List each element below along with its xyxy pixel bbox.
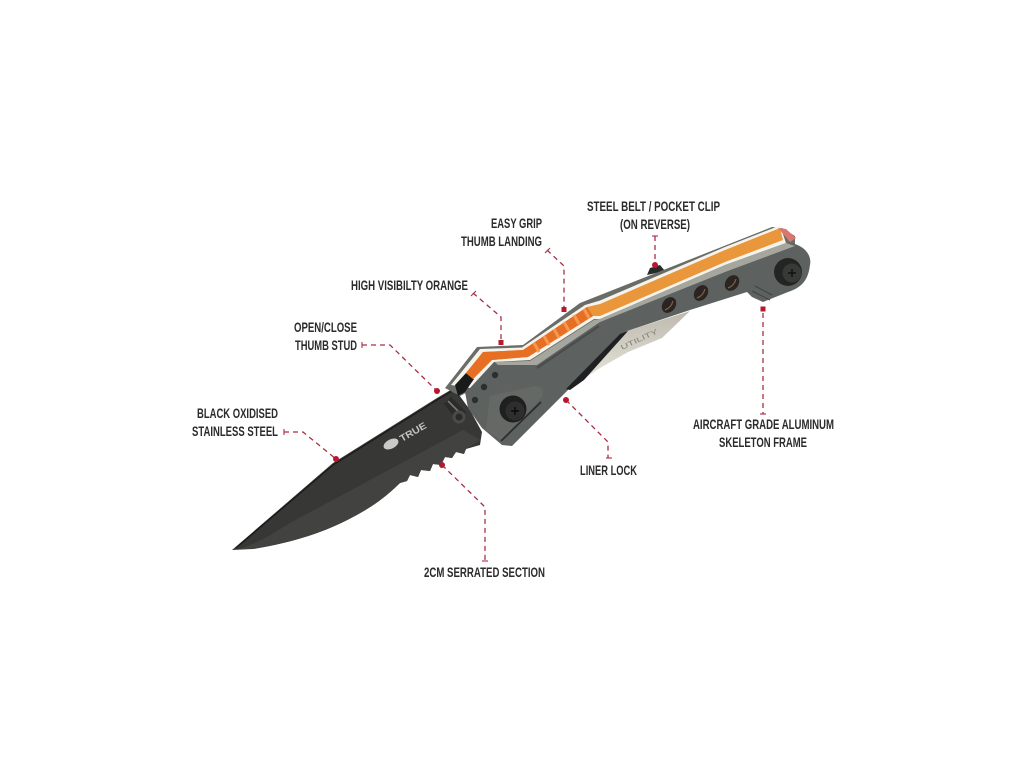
thumb grip ridges: [534, 309, 589, 352]
callout: high visibilty orange: HIGH VISIBILTY ORANGE: [351, 277, 468, 293]
frame holes: [659, 272, 742, 316]
belt clip tip: [647, 265, 665, 275]
callout: black oxidised stainless steel: BLACK OXIDISED: [197, 405, 278, 421]
silver lower scale with etched text: [582, 311, 690, 380]
callout: open/close thumb stud: OPEN/CLOSE: [294, 319, 357, 335]
blade logo: [382, 421, 429, 452]
liner lock slit: [501, 331, 628, 441]
callout: high visibilty orange: [351, 277, 504, 345]
pivot bolt rear: [774, 258, 802, 286]
knife illustration: [232, 226, 810, 550]
callout: open/close thumb stud: [294, 319, 440, 394]
silver edge band: [495, 243, 795, 365]
white inner strip: [451, 226, 786, 388]
callout: aircraft grade aluminum skeleton frame: SKELETON FRAME: [719, 434, 807, 450]
callout: 2cm serrated section: 2CM SERRATED SECTION: [424, 564, 545, 580]
callout: aircraft grade aluminum skeleton frame: [693, 306, 834, 450]
handle: grey body and skeleton frame: [465, 243, 810, 446]
frame notch detail: [752, 286, 772, 300]
callout: open/close thumb stud: THUMB STUD: [295, 337, 357, 353]
orange stripe: [466, 228, 796, 379]
callout: 2cm serrated section: [424, 462, 545, 580]
small screws: [472, 372, 498, 403]
callout: steel belt / pocket clip: (ON REVERSE): [620, 216, 690, 232]
callout: black oxidised stainless steel: STAINLESS STEEL: [192, 423, 278, 439]
silver lower scale with etched text: UTILITY: [620, 328, 660, 352]
pivot bolt front: [500, 396, 526, 422]
callout: liner lock: LINER LOCK: [580, 462, 637, 478]
blade: [232, 388, 482, 550]
dark shading under silver band: [537, 326, 599, 368]
blade logo: TRUE: [398, 421, 429, 445]
callout: aircraft grade aluminum skeleton frame: AIRCRAFT GRADE ALUMINUM: [693, 416, 834, 432]
gap behind orange: [455, 373, 474, 396]
thumb stud: [444, 397, 466, 424]
callout: easy grip thumb landing: THUMB LANDING: [461, 233, 542, 249]
front bolster plate: [486, 386, 543, 441]
callout: steel belt / pocket clip: STEEL BELT / POCKET CLIP: [587, 198, 720, 214]
handle: rear back scale: [445, 227, 795, 396]
callout: easy grip thumb landing: EASY GRIP: [491, 215, 542, 231]
callout: steel belt / pocket clip: [587, 198, 720, 268]
callout: easy grip thumb landing: [461, 215, 566, 312]
callout: black oxidised stainless steel: [192, 405, 339, 462]
callout: liner lock: [563, 397, 637, 478]
